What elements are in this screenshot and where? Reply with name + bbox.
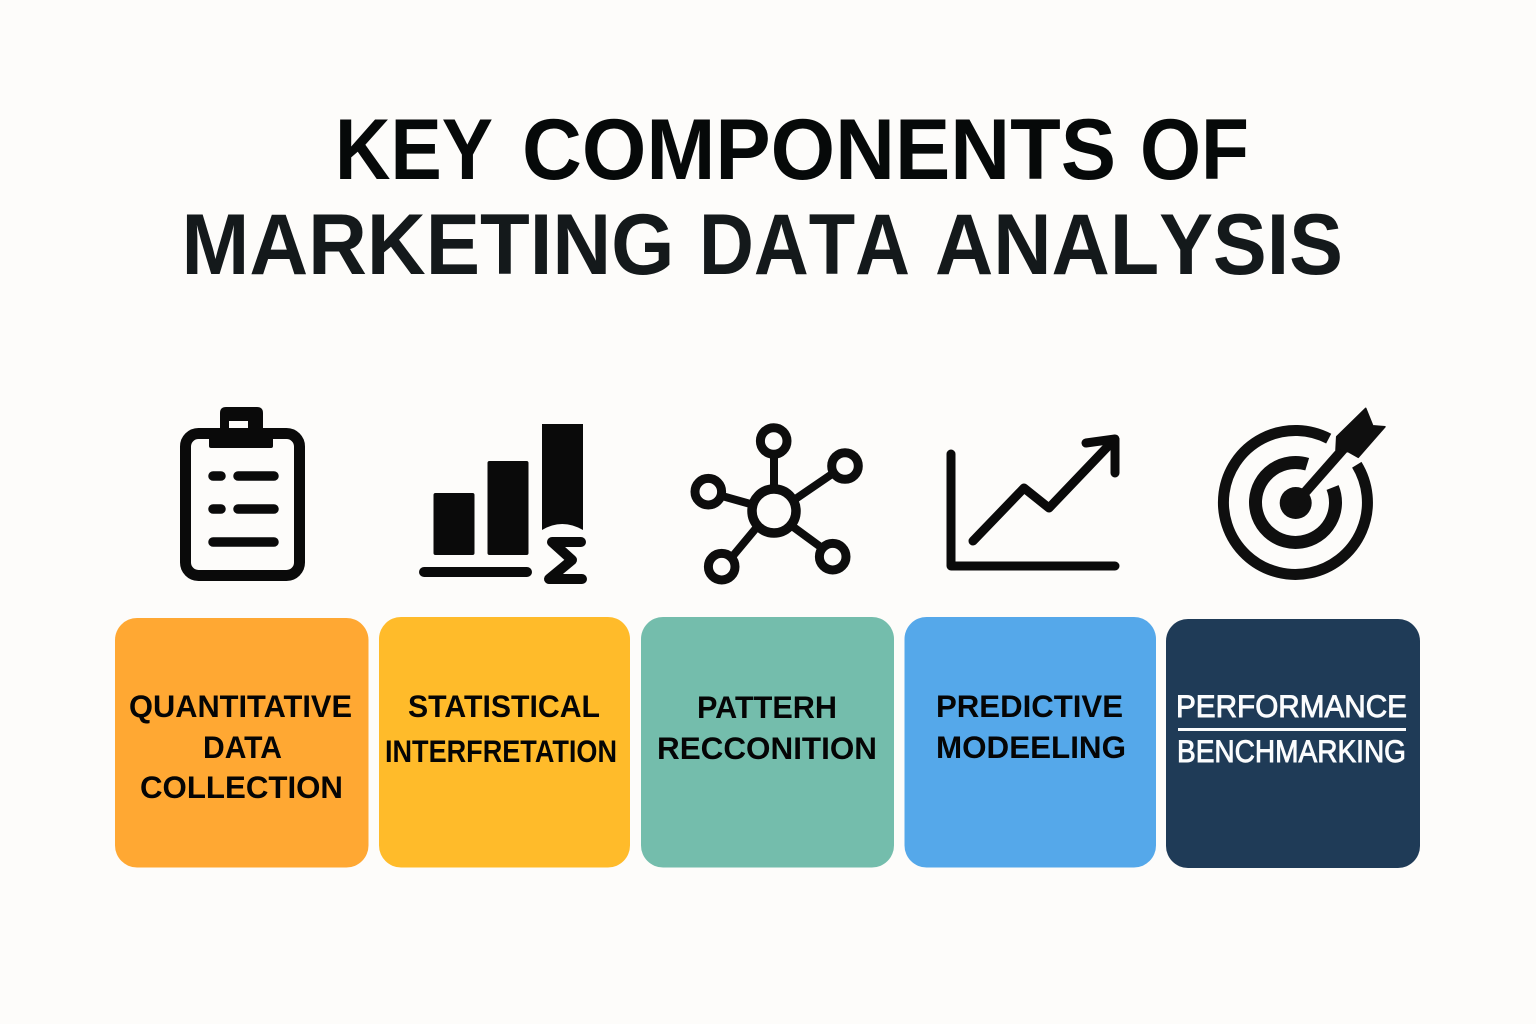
card: quantitative data collection: COLLECTION	[140, 769, 343, 805]
title: DATA	[699, 197, 910, 293]
card: predictive modeling: MODEELING	[936, 729, 1126, 765]
card: quantitative data collection: DATA	[203, 729, 282, 765]
title: KEY	[335, 102, 493, 198]
card: performance benchmarking	[1166, 619, 1420, 868]
card: quantitative data collection: QUANTITATIVE	[129, 688, 352, 724]
card: statistical interpretation: INTERFRETATION	[385, 733, 617, 769]
card: pattern recognition	[641, 617, 894, 868]
card: predictive modeling: PREDICTIVE	[936, 688, 1123, 724]
card: statistical interpretation: STATISTICAL	[408, 688, 600, 724]
card: statistical interpretation	[379, 617, 630, 868]
title: COMPONENTS	[522, 102, 1116, 198]
card: pattern recognition: RECCONITION	[657, 730, 877, 766]
card: performance benchmarking: BENCHMARKING	[1177, 733, 1406, 769]
title: OF	[1140, 102, 1249, 198]
icon: network nodes	[695, 428, 858, 580]
card: performance benchmarking: PERFORMANCE	[1176, 688, 1407, 724]
title: MARKETING	[182, 197, 674, 293]
icon: target with arrow	[1223, 408, 1385, 574]
icon: clipboard	[186, 407, 300, 576]
card: pattern recognition: PATTERH	[697, 689, 837, 725]
icon: growth line chart	[951, 439, 1115, 566]
title	[182, 102, 1343, 293]
card: quantitative data collection	[115, 618, 368, 868]
card: predictive modeling	[904, 617, 1156, 868]
icon: bar chart with sigma	[419, 424, 583, 579]
title: ANALYSIS	[935, 197, 1343, 293]
